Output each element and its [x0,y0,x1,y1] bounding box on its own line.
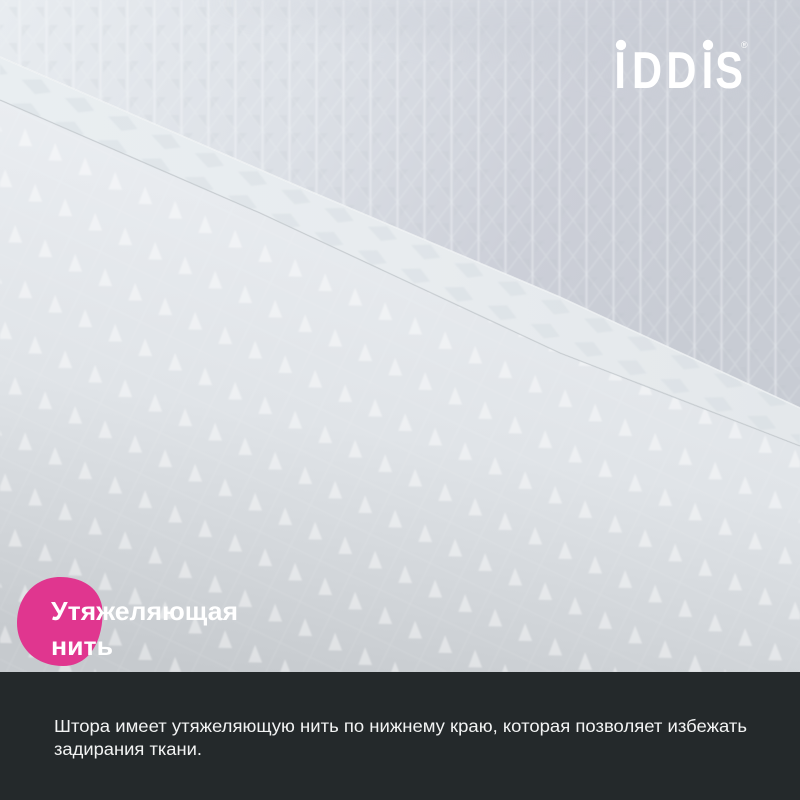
pink blob behind heading [17,577,103,666]
description text: задирания ткани. [54,739,202,759]
logo: IDDIS: IDDIS [614,41,743,99]
hem band with weighted thread [0,57,800,446]
footer panel [0,672,800,800]
heading: нить [51,631,113,661]
lower fabric layer [0,90,800,672]
heading: Утяжеляющая [51,596,238,626]
description text [54,716,747,759]
upper fabric layer [0,0,800,420]
heading [51,596,238,661]
logo: IDDIS: ® [741,40,748,50]
description text: Штора имеет утяжеляющую нить по нижнему краю, которая позволяет избежать [54,716,747,736]
